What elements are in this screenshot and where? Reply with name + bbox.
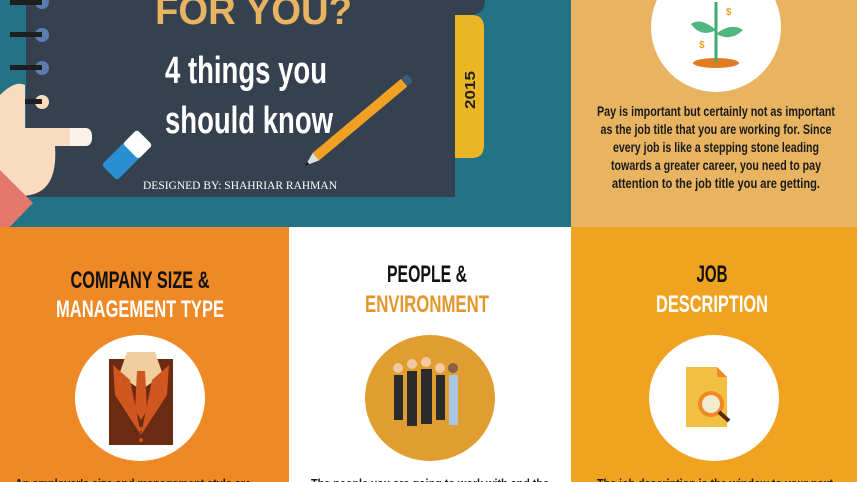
icon: money plant: $ (726, 7, 732, 18)
panel: people (289, 227, 571, 482)
panel: header (0, 0, 571, 227)
title: 4 things you (165, 50, 327, 92)
tab: 2015: 2015 (462, 71, 479, 109)
heading: job (656, 261, 768, 318)
panel: job description (571, 227, 857, 482)
icon: suit (75, 335, 205, 461)
icon: money plant (651, 0, 781, 92)
chalkboard (26, 0, 485, 197)
hand (0, 84, 92, 237)
tab: 2015 (455, 15, 484, 158)
panel: company size (0, 227, 289, 482)
heading: company size (56, 267, 224, 323)
credit: DESIGNED BY: SHAHRIAR RAHMAN (143, 178, 337, 192)
heading: people: PEOPLE & (387, 261, 467, 288)
title: should know (165, 100, 333, 142)
heading: company size: COMPANY SIZE & (70, 267, 210, 294)
heading: job: DESCRIPTION (656, 291, 768, 318)
icon: money plant: $ (699, 40, 705, 51)
heading: job: JOB (696, 261, 728, 288)
icon: document magnifier (649, 335, 779, 461)
title (155, 0, 352, 142)
rings (10, 0, 49, 109)
heading: people: ENVIRONMENT (365, 291, 489, 318)
bottom texts (15, 476, 834, 482)
panel: job title pay (571, 0, 857, 227)
heading: company size: MANAGEMENT TYPE (56, 296, 224, 323)
icon: people (365, 335, 495, 461)
text: pay (597, 103, 835, 191)
pencil (301, 74, 413, 170)
heading: people (365, 261, 489, 318)
eraser (102, 130, 152, 180)
